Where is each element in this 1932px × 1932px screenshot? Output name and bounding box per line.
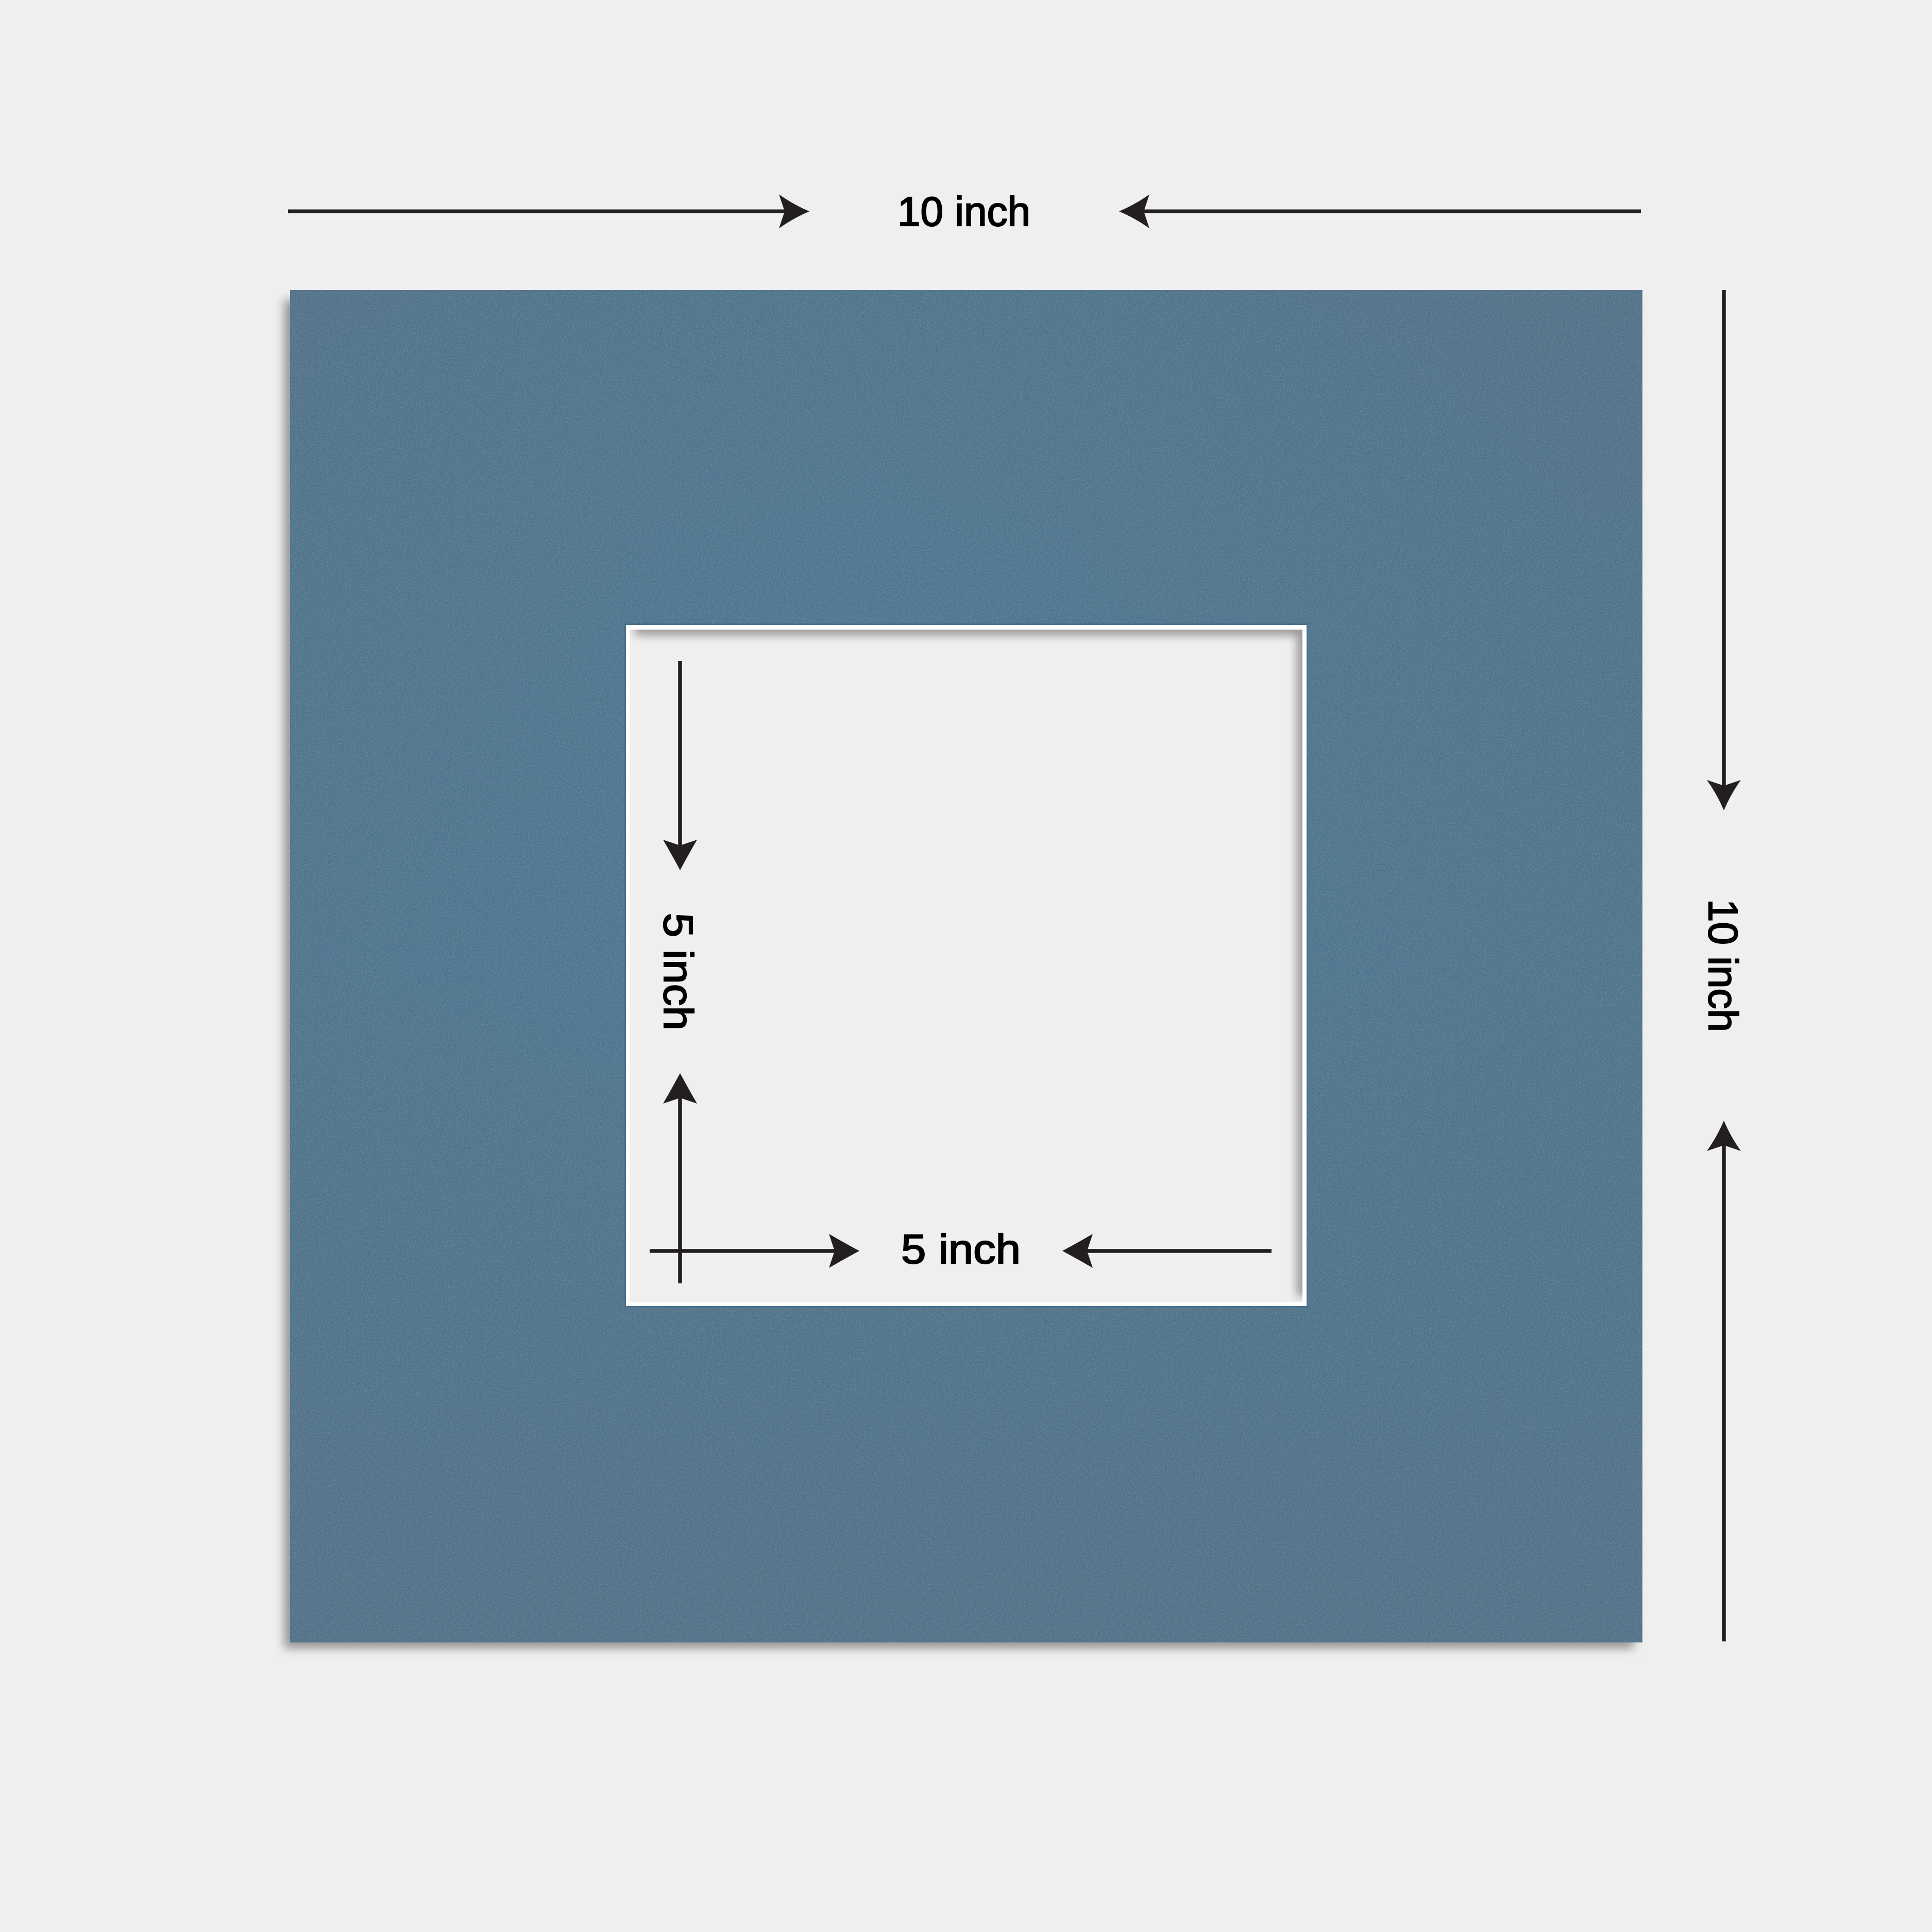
arrow: top left, pointing right: [288, 194, 809, 228]
arrow: window left, pointing down: [663, 661, 697, 870]
arrow: top right, pointing left: [1119, 194, 1641, 228]
panel: blue mat board: [290, 290, 1642, 1642]
label: window left 5 inch: 5 inch: [655, 913, 701, 1030]
mat shadow: [284, 300, 1634, 1649]
arrow: right side, pointing up: [1707, 1121, 1741, 1641]
infographic canvas: [278, 194, 1741, 1655]
arrow: window bottom right, pointing left: [1062, 1234, 1272, 1268]
label: top 10 inch: 10 inch: [897, 189, 1030, 234]
arrow: window left, pointing up: [663, 1073, 697, 1283]
arrow: window bottom left, pointing right: [650, 1234, 859, 1268]
label: right 10 inch: 10 inch: [1700, 899, 1746, 1032]
arrow: right side, pointing down: [1707, 290, 1741, 810]
label: window bottom 5 inch: 5 inch: [901, 1226, 1021, 1272]
panel: window opening: [624, 613, 1319, 1308]
